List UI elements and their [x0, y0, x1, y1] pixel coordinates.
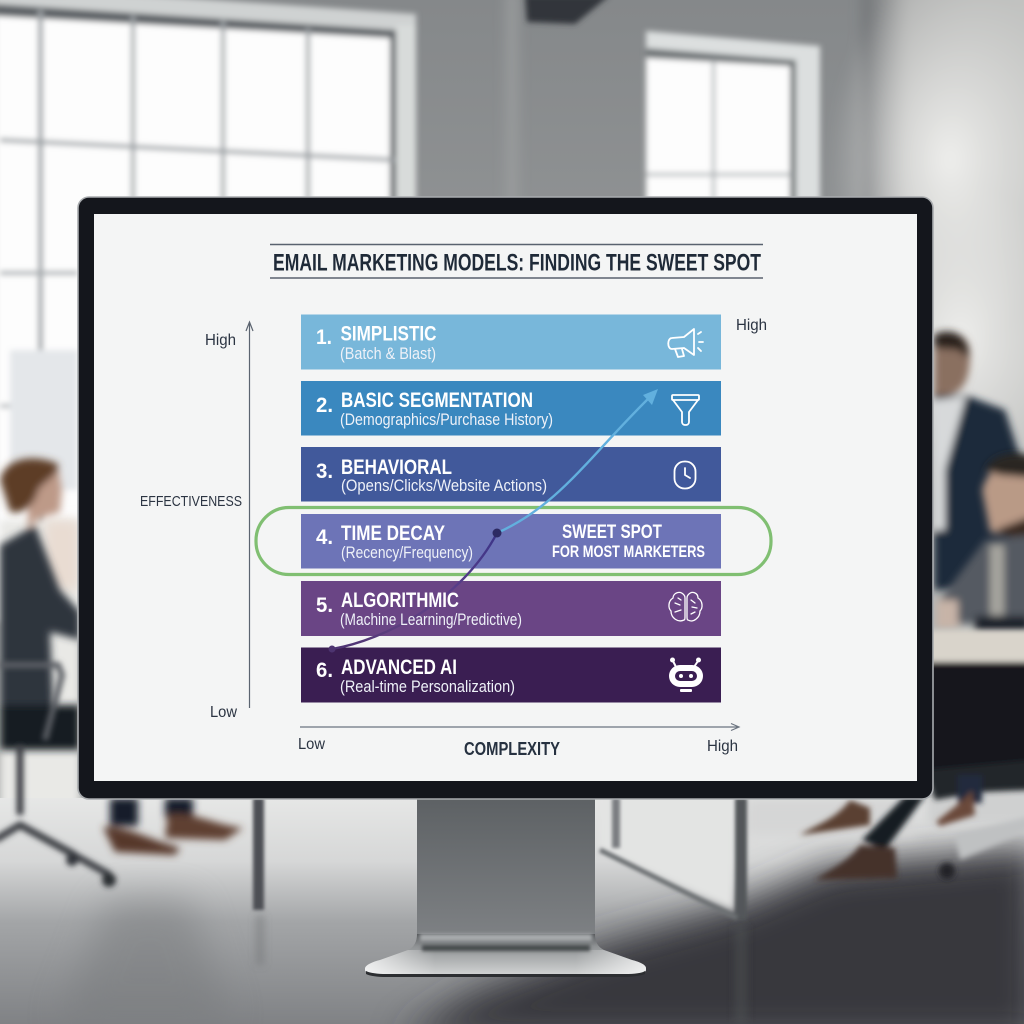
icon: robot	[669, 658, 703, 692]
bar 5: algorithmic: 5.	[316, 594, 333, 617]
bar 2: basic segmentation: 2.	[316, 394, 333, 417]
bar 4: time decay	[301, 514, 721, 568]
warm glow behind left person	[45, 520, 79, 590]
bar 6: advanced ai: (Real-time Personalization)	[340, 677, 515, 696]
title: EMAIL MARKETING MODELS: FINDING THE SWEET SPOT	[273, 250, 761, 276]
sweet spot highlight pill	[256, 508, 771, 574]
vertical axis: effectiveness: Low	[210, 704, 237, 721]
bar 2: basic segmentation: (Demographics/Purchase History)	[340, 410, 553, 429]
bar 1: simplistic: 1.	[316, 326, 332, 349]
bar 1: simplistic	[301, 314, 721, 370]
left floor shadow band	[60, 900, 230, 1024]
vertical axis: effectiveness: EFFECTIVENESS	[140, 493, 242, 510]
floor	[0, 798, 1024, 1024]
bar 6: advanced ai: ADVANCED AI	[341, 656, 457, 679]
bar 5 labels: ALGORITHMIC	[341, 589, 459, 612]
horizontal axis: complexity: COMPLEXITY	[464, 739, 560, 759]
left window	[0, 0, 416, 625]
bar 6: advanced ai: 6.	[316, 659, 333, 682]
icon: clock	[674, 462, 696, 488]
bar 1: simplistic: (Batch & Blast)	[340, 344, 436, 363]
bar 3: behavioral: BEHAVIORAL	[341, 456, 452, 479]
standing person right	[934, 332, 1024, 590]
horizontal axis: complexity: Low	[298, 736, 325, 753]
sweet spot label	[552, 522, 705, 561]
progress curve with arrow	[328, 389, 658, 652]
sweet spot label: SWEET SPOT	[562, 522, 662, 543]
bar 4: time decay: TIME DECAY	[341, 522, 445, 545]
light floor mid right	[745, 796, 915, 836]
icon: brain	[669, 592, 702, 621]
bar 2: basic segmentation	[301, 381, 721, 436]
table and legs right	[800, 630, 1024, 880]
bar 5: algorithmic	[301, 581, 721, 636]
monitor stand	[365, 798, 646, 977]
seated person right	[936, 454, 1024, 632]
right side wall	[507, 0, 1024, 810]
back wall	[0, 0, 1024, 810]
leg reflections	[256, 915, 747, 1024]
sweet spot label: FOR MOST MARKETERS	[552, 542, 705, 561]
bar 1: simplistic: SIMPLISTIC	[340, 322, 436, 346]
left person shoes	[103, 798, 243, 855]
vertical axis: effectiveness	[140, 322, 253, 721]
bar 4: time decay: 4.	[316, 526, 333, 549]
left chair	[0, 665, 116, 887]
horizontal axis: complexity: High	[707, 738, 738, 755]
icon: funnel	[672, 395, 699, 425]
ceiling fixture	[525, 0, 610, 24]
table legs and partition frame	[253, 798, 747, 920]
lower left light area	[0, 520, 80, 810]
bar 3: behavioral: 3.	[316, 460, 333, 483]
bar 3: behavioral: (Opens/Clicks/Website Actions)	[341, 476, 547, 495]
seated person left	[0, 458, 80, 750]
stand base	[365, 934, 646, 977]
bar 5 labels	[340, 589, 522, 629]
dark floor shadow right	[400, 845, 1024, 1024]
monitor screen	[94, 214, 917, 781]
bar 6: advanced ai	[301, 648, 721, 702]
bar 2: basic segmentation: BASIC SEGMENTATION	[341, 389, 533, 412]
right window	[646, 31, 820, 210]
monitor bezel	[78, 197, 933, 799]
vertical axis: effectiveness: High	[205, 332, 236, 349]
light floor far right	[925, 780, 1024, 825]
icon: megaphone	[668, 329, 703, 357]
bar 4: time decay: (Recency/Frequency)	[341, 543, 473, 562]
bar 3: behavioral	[301, 447, 721, 502]
bar 5 labels: (Machine Learning/Predictive)	[340, 610, 522, 629]
horizontal axis: complexity	[298, 724, 739, 759]
glass partition	[598, 790, 735, 912]
stand neck	[417, 798, 595, 938]
right-side high label: High	[736, 317, 767, 334]
